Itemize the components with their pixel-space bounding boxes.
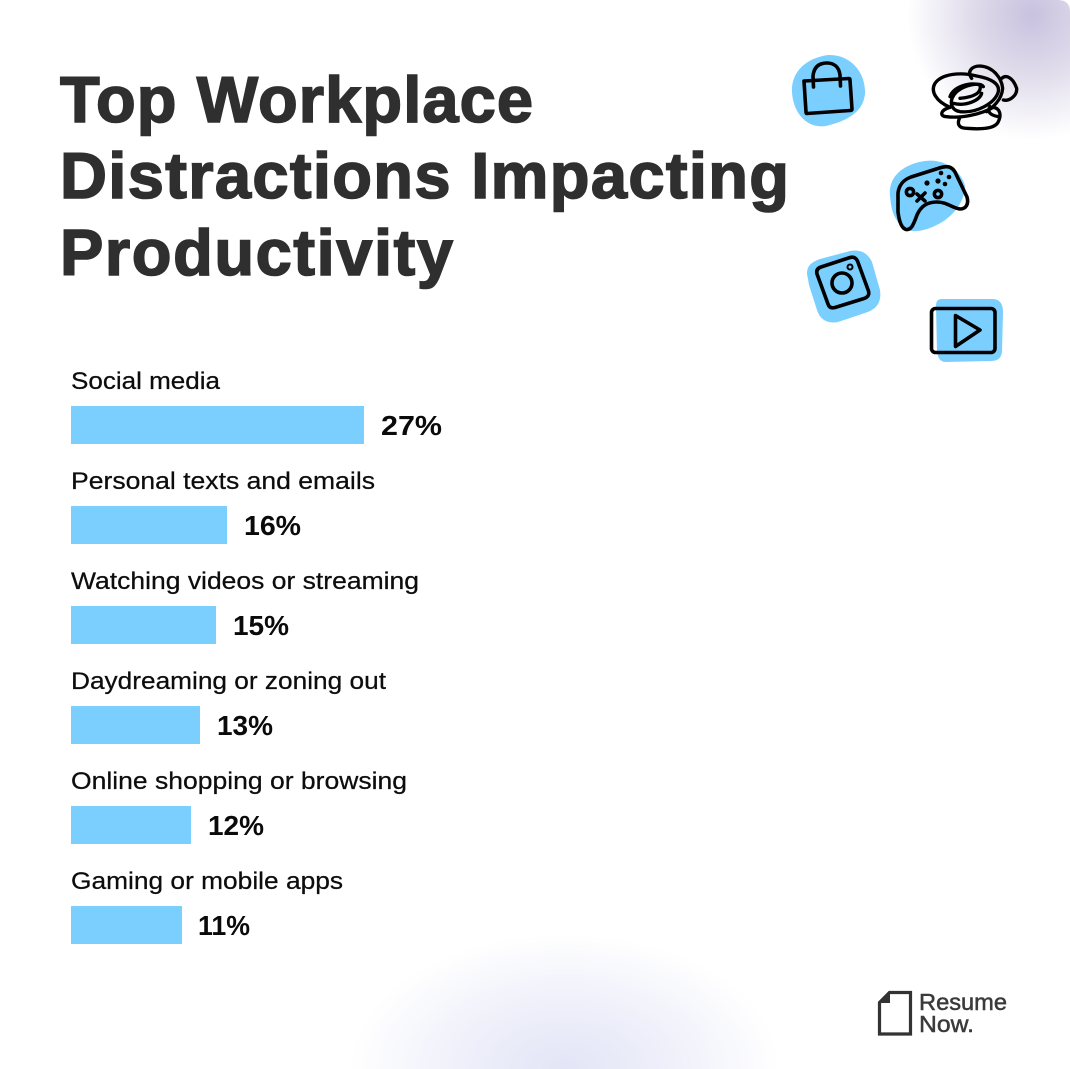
bar row: personal texts and emails: 16% (244, 510, 301, 541)
title (60, 63, 789, 289)
bar row: watching videos or streaming: 15% (233, 610, 289, 641)
bar row: gaming or mobile apps: Gaming or mobile apps (71, 868, 343, 895)
icon: scribble (933, 66, 1017, 129)
icon: video player (932, 299, 1003, 362)
bar row: watching videos or streaming: Watching videos or streaming (71, 568, 419, 595)
bar row: online shopping or browsing: 12% (208, 810, 264, 841)
bar row: daydreaming or zoning out: Daydreaming or zoning out (71, 668, 386, 695)
bar row: online shopping or browsing: Online shopping or browsing (71, 768, 407, 795)
bar row: online shopping or browsing (71, 768, 407, 844)
bar row: social media: Social media (71, 368, 221, 395)
bar row: daydreaming or zoning out: 13% (217, 710, 273, 741)
logo: Resume Now: Resume (919, 989, 1007, 1015)
bar row: daydreaming or zoning out (71, 668, 386, 744)
icon: game controller (890, 161, 968, 231)
title: Productivity (60, 216, 453, 289)
bar row: personal texts and emails: Personal texts and emails (71, 468, 375, 495)
bar row: gaming or mobile apps: 11% (198, 910, 250, 941)
logo: Resume Now (878, 989, 1007, 1037)
icon: instagram (807, 250, 880, 322)
bar row: gaming or mobile apps (71, 868, 343, 944)
title: Top Workplace (60, 63, 533, 136)
title: Distractions Impacting (60, 139, 789, 212)
bar row: social media: 27% (381, 410, 442, 441)
logo: Resume Now: Now. (919, 1011, 974, 1037)
bar row: watching videos or streaming (71, 568, 419, 644)
bar row: social media (71, 368, 442, 444)
bar row: personal texts and emails (71, 468, 375, 544)
icon: shopping bag (792, 55, 865, 126)
